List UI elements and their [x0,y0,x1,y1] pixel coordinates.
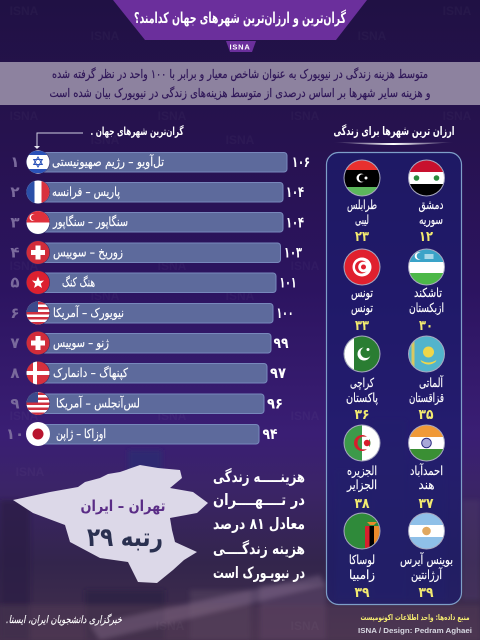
row 1: ۱ [10,153,20,171]
row 8 [10,361,286,385]
row 8: ۹۷ [270,364,286,382]
city: Buenos Aires: بوینس آیرس [400,552,453,568]
ISNA watermarks: ISNA [443,4,472,18]
row 10: اوزاکا – ژاپن [56,426,106,442]
Tehran note [213,467,305,582]
row 8: ۸ [10,364,20,382]
city: Algiers [344,424,380,512]
row 2: ۲ [10,183,20,201]
row 6 [10,301,294,325]
ISNA tab: ISNA [229,42,251,52]
city: Buenos Aires: آرژانتین [411,567,442,583]
row 9: ۹ [10,394,20,412]
ISNA watermarks: ISNA [158,409,187,423]
ISNA watermarks: ISNA [291,619,320,633]
ISNA watermarks: ISNA [91,289,120,303]
city: Tunis: ۳۳ [355,318,369,334]
ISNA watermarks: ISNA [291,409,320,423]
ISNA watermarks: ISNA [358,29,387,43]
map: Tehran [13,465,208,583]
row 5: ۵ [10,274,20,292]
city: Almaty: ۳۵ [418,407,434,423]
heading underline swoosh [333,142,454,145]
row 1 [10,150,310,174]
city: Tashkent: ۳۰ [419,318,433,334]
city: Damascus [408,160,445,245]
row 4: ۴ [10,244,20,262]
ISNA watermarks: ISNA [10,259,39,273]
row 2: ۱۰۴ [286,183,304,201]
city: Tripoli: لیبی [355,212,369,227]
ISNA watermarks: ISNA [226,289,255,303]
row 7: ژنو – سوییس [53,335,109,351]
city: Ahmedabad [408,424,445,512]
ISNA watermarks: ISNA [158,259,187,273]
city: Karachi: پاکستان [346,390,378,405]
intro band [0,62,480,105]
row 2 [10,180,304,204]
ISNA watermarks: ISNA [226,133,255,147]
ISNA watermarks: ISNA [291,259,320,273]
ISNA watermarks: ISNA [10,109,39,123]
agency signature: خبرگزاری دانشجویان ایران، ایسنا. [6,613,122,626]
city: Tunis: تونس [351,285,373,301]
map label: city: تهران – ایران [80,497,166,515]
city: Almaty [408,336,445,423]
city: Algiers: الجزیره [347,463,377,479]
row 3 [10,210,304,234]
panel: cheapest cities [326,152,462,604]
row 8: کپنهاگ – دانمارک [53,365,128,381]
city: Lusaka: ۳۹ [354,585,370,601]
row 9: لس‌آنجلس – آمریکا [56,396,140,412]
city: Damascus: سوریه [419,212,443,228]
row 1: تل‌آویو – رژیم صهیونیستی [52,154,164,170]
ISNA watermarks: ISNA [291,109,320,123]
city: Algiers: ۳۸ [354,496,370,512]
row 7: ۷ [10,334,20,352]
ISNA tab [226,41,256,52]
city: Ahmedabad: احمدآباد [410,463,443,478]
ranking list [6,150,310,446]
city: Lusaka: زامبیا [349,567,375,583]
ISNA watermarks: ISNA [10,409,39,423]
ISNA watermarks: ISNA [91,29,120,43]
city: Almaty: آلماتی [419,375,443,390]
row 4: ۱۰۳ [284,244,302,262]
city: Tripoli [344,160,380,245]
city: Almaty: قزاقستان [409,390,444,406]
city: Tunis: تونس [351,300,373,316]
ISNA watermarks: ISNA [156,619,185,633]
ISNA watermarks: ISNA [16,465,45,479]
Tehran note: در تــــهــــران [213,491,305,509]
ISNA watermarks: ISNA [443,109,472,123]
row 6: ۶ [10,304,20,322]
city: Ahmedabad: ۳۷ [418,496,434,512]
city: Tashkent: تاشکند [414,285,442,300]
city: Damascus: ۱۲ [419,229,433,245]
city skyline backdrop [0,420,480,640]
city: Karachi: کراچی [350,375,374,391]
city: Damascus: دمشق [418,197,444,213]
ISNA watermarks: ISNA [158,109,187,123]
row 5 [10,270,296,294]
ISNA watermarks: ISNA [91,133,120,147]
row 3: ۳ [10,214,20,232]
title banner [113,0,367,40]
city: Tashkent: ازبکستان [409,300,444,316]
row 10: ۹۴ [262,425,278,443]
row 6: نیویورک – آمریکا [53,305,124,321]
ISNA watermarks: ISNA [10,4,39,18]
title: گران‌ترین و ارزان‌ترین شهرهای جهان کدامند؟ [134,9,346,27]
row 7 [10,331,288,355]
source credit [358,613,472,635]
map label: rank: رتبه ۲۹ [87,523,163,553]
city: Tunis [344,248,380,334]
city: Tripoli: طرابلس [347,197,377,213]
row 1: ۱۰۶ [292,153,310,171]
Tehran note: هزینـــــه زندگی [213,467,305,486]
row 10 [6,422,278,446]
row 5: ۱۰۱ [280,274,296,292]
row 4 [10,240,302,264]
city: Buenos Aires [400,512,453,601]
row 10: ۱۰ [6,425,24,443]
connector arrow [34,133,83,149]
Tehran note: در نیویـورک است [213,564,305,582]
city: Lusaka [344,512,380,601]
city: Algiers: الجزایر [346,477,377,493]
row 3: سنگاپور – سنگاپور [52,214,128,230]
row 7: ۹۹ [274,334,288,352]
row 9: ۹۶ [267,394,283,412]
row 4: زوریخ – سوییس [53,244,123,260]
row 2: پاریس – فرانسه [52,184,120,200]
city: Karachi [344,336,380,423]
city: Ahmedabad: هند [418,477,434,492]
city: Tashkent [408,248,445,334]
heading: most expensive: گران‌ترین شهرهای جهان . [90,125,184,138]
city: Buenos Aires: ۳۹ [418,585,434,601]
row 6: ۱۰۰ [276,304,294,322]
city: Tripoli: ۲۳ [355,229,369,245]
row 9 [10,392,283,416]
source credit: ISNA / Design: Pedram Aghaei [358,626,472,635]
Tehran note: معادل ۸۱ درصد [213,515,305,533]
row 5: هنگ کنگ [62,274,95,290]
city: Karachi: ۳۶ [354,407,370,423]
city: Lusaka: لوساکا [349,552,375,568]
Tehran note: هزینه زندگــــی [213,539,305,558]
row 3: ۱۰۴ [286,214,304,232]
